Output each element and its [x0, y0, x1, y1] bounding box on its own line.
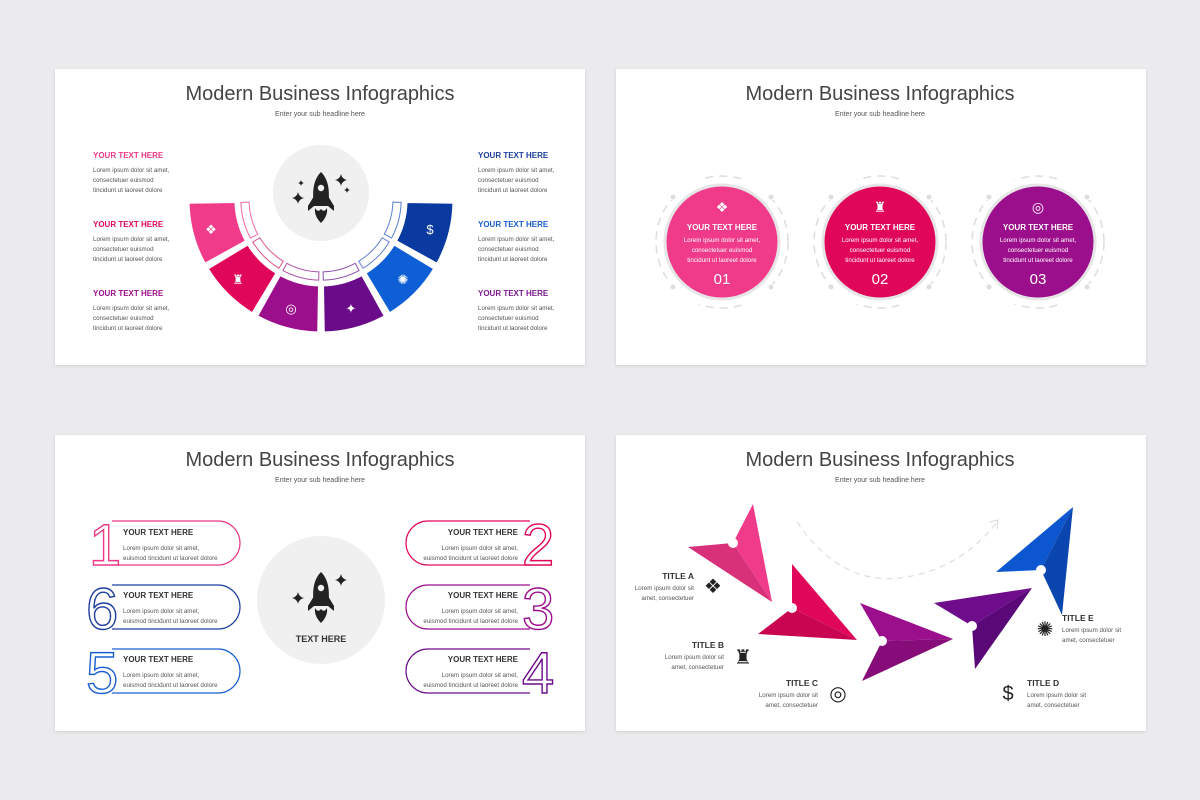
right pill text: euismod tincidunt ut laoreet dolore: [423, 682, 519, 689]
plane labels: amet, consectetuer: [671, 664, 724, 671]
left text blocks: tincidunt ut laoreet dolore: [93, 256, 163, 263]
left text blocks: YOUR TEXT HERE: [93, 151, 164, 160]
plane D: [934, 588, 1032, 669]
plane C: [860, 603, 953, 681]
left pill text: YOUR TEXT HERE: [123, 591, 194, 600]
left pill text: YOUR TEXT HERE: [123, 528, 194, 537]
semicircle segments: [184, 190, 458, 337]
left pill text: euismod tincidunt ut laoreet dolore: [123, 682, 218, 689]
circle 02: ♜: [874, 199, 886, 215]
plane icons: ✺: [1037, 619, 1053, 641]
circle 02: tincidunt ut laoreet dolore: [845, 257, 915, 264]
circle 03: tincidunt ut laoreet dolore: [1003, 257, 1073, 264]
slide 2 subtitle: Enter your sub headline here: [835, 111, 925, 118]
left text blocks: tincidunt ut laoreet dolore: [93, 187, 163, 194]
plane icons: $: [1002, 683, 1014, 705]
right pill text: euismod tincidunt ut laoreet dolore: [423, 555, 519, 562]
circle 02: [814, 176, 946, 308]
center circle with rocket: [273, 145, 369, 241]
plane labels: Lorem ipsum dolor sit: [1062, 627, 1121, 634]
left text blocks: Lorem ipsum dolor sit amet,: [93, 305, 170, 312]
circle 03: consectetuer euismod: [1008, 247, 1069, 254]
left text blocks: [93, 151, 170, 332]
slide 3 title: Modern Business Infographics: [185, 449, 455, 471]
right pill text: YOUR TEXT HERE: [448, 655, 519, 664]
slide 1 panel: [55, 69, 585, 365]
slide 3 subtitle: Enter your sub headline here: [275, 477, 365, 484]
circle 03: [972, 176, 1104, 308]
slide 3 panel: [55, 435, 585, 731]
right text blocks: [478, 151, 555, 332]
slide 4 title: Modern Business Infographics: [745, 449, 1015, 471]
circle 03: YOUR TEXT HERE: [1003, 223, 1074, 232]
right pills: 3: [522, 577, 554, 642]
right text blocks: Lorem ipsum dolor sit amet,: [478, 236, 555, 243]
right pill text: Lorem ipsum dolor sit amet,: [442, 672, 518, 679]
plane labels: Lorem ipsum dolor sit: [1027, 692, 1086, 699]
segment icons: ✦: [346, 301, 357, 316]
slide 1 title: Modern Business Infographics: [185, 83, 455, 105]
circle 02: 02: [872, 271, 888, 288]
right text blocks: tincidunt ut laoreet dolore: [478, 325, 548, 332]
circle 01: ❖: [716, 199, 728, 215]
plane E: [996, 507, 1073, 615]
segment icons: [205, 222, 434, 316]
left text blocks: Lorem ipsum dolor sit amet,: [93, 236, 170, 243]
segment icons: ◎: [285, 301, 297, 316]
dashed arrow: [797, 520, 998, 579]
right pill text: [423, 528, 519, 689]
center circle: TEXT HERE: [296, 634, 346, 644]
plane labels: [635, 571, 1121, 709]
plane icons: ❖: [704, 576, 722, 598]
right text blocks: YOUR TEXT HERE: [478, 289, 549, 298]
right text blocks: consectetuer euismod: [478, 177, 539, 184]
plane labels: amet, consectetuer: [1062, 637, 1115, 644]
right text blocks: tincidunt ut laoreet dolore: [478, 256, 548, 263]
plane icons: ◎: [829, 683, 847, 705]
right pill text: YOUR TEXT HERE: [448, 528, 519, 537]
left pill text: euismod tincidunt ut laoreet dolore: [123, 555, 218, 562]
right text blocks: YOUR TEXT HERE: [478, 151, 549, 160]
left pills: 1: [89, 513, 121, 578]
plane labels: Lorem ipsum dolor sit: [665, 654, 724, 661]
plane labels: TITLE D: [1027, 678, 1059, 688]
left text blocks: consectetuer euismod: [93, 177, 154, 184]
right text blocks: consectetuer euismod: [478, 315, 539, 322]
plane labels: Lorem ipsum dolor sit: [759, 692, 818, 699]
plane labels: TITLE E: [1062, 613, 1094, 623]
plane labels: amet, consectetuer: [641, 595, 694, 602]
circle 01: [656, 176, 788, 308]
circle 03: Lorem ipsum dolor sit amet,: [1000, 237, 1076, 244]
right text blocks: YOUR TEXT HERE: [478, 220, 549, 229]
slide 1 subtitle: Enter your sub headline here: [275, 111, 365, 118]
plane labels: TITLE C: [786, 678, 818, 688]
circle 02: YOUR TEXT HERE: [845, 223, 916, 232]
left pill text: [123, 528, 218, 689]
right text blocks: consectetuer euismod: [478, 246, 539, 253]
left text blocks: consectetuer euismod: [93, 315, 154, 322]
circle 03: ◎: [1032, 199, 1044, 215]
left text blocks: YOUR TEXT HERE: [93, 220, 164, 229]
left pills: 6: [86, 577, 118, 642]
left pill text: Lorem ipsum dolor sit amet,: [123, 608, 200, 615]
segment icons: $: [426, 222, 434, 237]
circle 02: consectetuer euismod: [850, 247, 911, 254]
right text blocks: tincidunt ut laoreet dolore: [478, 187, 548, 194]
segment icons: ♜: [232, 272, 244, 287]
right pill text: Lorem ipsum dolor sit amet,: [442, 545, 518, 552]
circle 01: tincidunt ut laoreet dolore: [687, 257, 757, 264]
circle 01: 01: [714, 271, 730, 288]
slide 2 title: Modern Business Infographics: [745, 83, 1015, 105]
right pill text: Lorem ipsum dolor sit amet,: [442, 608, 518, 615]
slide 4 subtitle: Enter your sub headline here: [835, 477, 925, 484]
left pill text: Lorem ipsum dolor sit amet,: [123, 672, 200, 679]
left text blocks: YOUR TEXT HERE: [93, 289, 164, 298]
left pills: [86, 513, 240, 706]
plane A: [688, 504, 772, 602]
left pill text: Lorem ipsum dolor sit amet,: [123, 545, 200, 552]
plane icons: [704, 576, 1053, 705]
slide 2 panel: [616, 69, 1146, 365]
plane labels: amet, consectetuer: [1027, 702, 1080, 709]
right pills: 4: [522, 641, 554, 706]
right text blocks: Lorem ipsum dolor sit amet,: [478, 305, 555, 312]
circle 01: YOUR TEXT HERE: [687, 223, 758, 232]
left pill text: YOUR TEXT HERE: [123, 655, 194, 664]
left pill text: euismod tincidunt ut laoreet dolore: [123, 618, 218, 625]
segment icons: ❖: [205, 222, 217, 237]
plane icons: ♜: [734, 647, 752, 669]
plane B: [758, 564, 857, 640]
circle 01: consectetuer euismod: [692, 247, 753, 254]
slide 4 panel: [616, 435, 1146, 731]
left text blocks: Lorem ipsum dolor sit amet,: [93, 167, 170, 174]
plane labels: Lorem ipsum dolor sit: [635, 585, 694, 592]
right pill text: YOUR TEXT HERE: [448, 591, 519, 600]
left text blocks: consectetuer euismod: [93, 246, 154, 253]
right pill text: euismod tincidunt ut laoreet dolore: [423, 618, 519, 625]
circle 02: Lorem ipsum dolor sit amet,: [842, 237, 918, 244]
circle 03: 03: [1030, 271, 1046, 288]
right pills: 2: [522, 513, 554, 578]
left text blocks: tincidunt ut laoreet dolore: [93, 325, 163, 332]
plane labels: TITLE A: [662, 571, 694, 581]
center circle: [257, 536, 385, 664]
circle 01: Lorem ipsum dolor sit amet,: [684, 237, 760, 244]
plane labels: TITLE B: [692, 640, 724, 650]
right text blocks: Lorem ipsum dolor sit amet,: [478, 167, 555, 174]
segment icons: ✺: [398, 272, 409, 287]
right pills: [406, 513, 554, 706]
left pills: 5: [86, 641, 118, 706]
plane labels: amet, consectetuer: [765, 702, 818, 709]
